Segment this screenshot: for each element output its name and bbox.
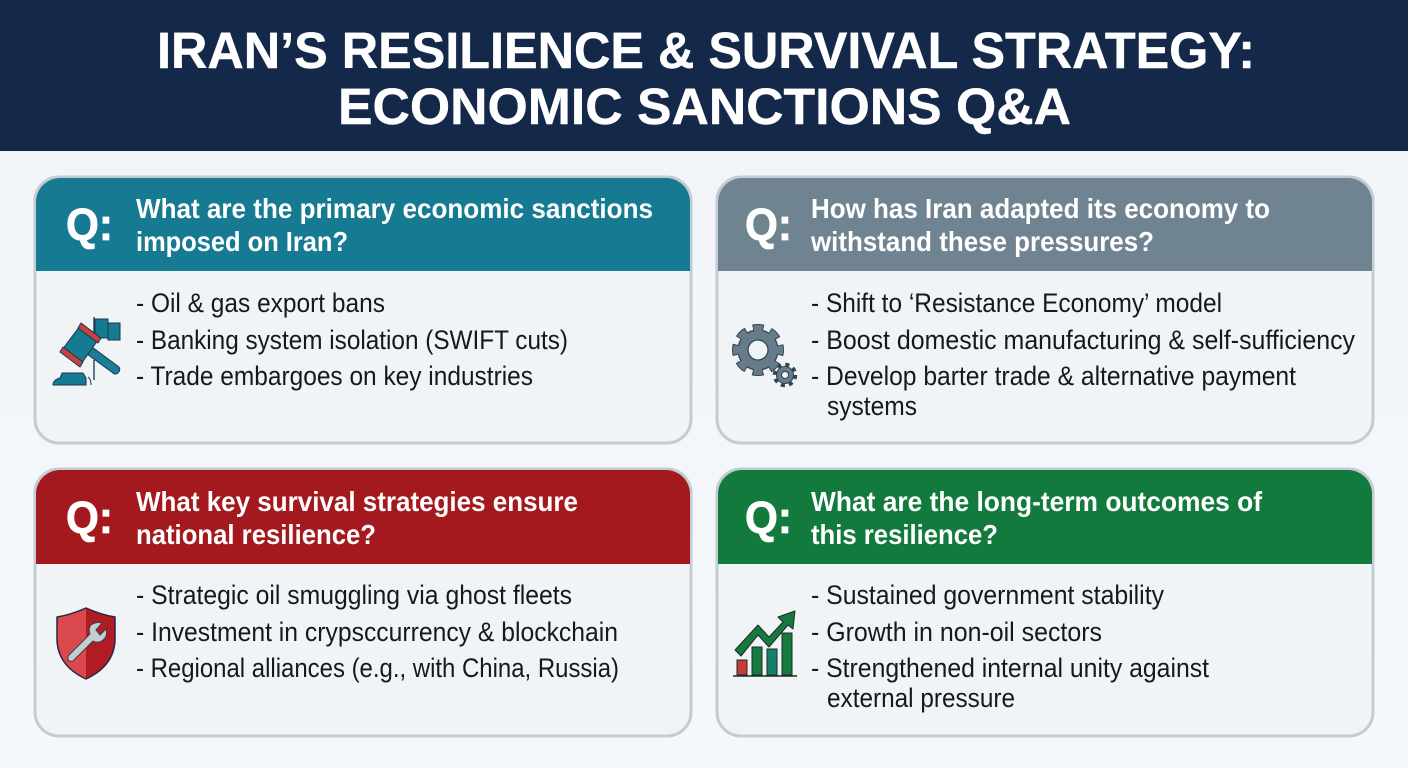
panel header: teal question: What are the primary economic sanctions bbox=[136, 193, 653, 224]
panel header: grey question bbox=[718, 178, 1372, 271]
survival list: - Strategic oil smuggling via ghost fleets bbox=[136, 580, 572, 610]
panel header: red question bbox=[36, 470, 690, 564]
panel: survival strategies bbox=[35, 469, 691, 736]
icon: gears bbox=[736, 328, 795, 385]
sanctions list bbox=[136, 288, 568, 391]
title banner: IRAN’S RESILIENCE & SURVIVAL STRATEGY: bbox=[157, 22, 1255, 79]
sanctions list: - Oil & gas export bans bbox=[136, 288, 385, 318]
panel header: red question: Q: bbox=[66, 492, 113, 543]
panel header: teal question: Q: bbox=[66, 199, 113, 250]
title banner: ECONOMIC SANCTIONS Q&A bbox=[338, 78, 1071, 135]
adaptation list: - Shift to ‘Resistance Economy’ model bbox=[811, 288, 1222, 318]
panel header: grey question: How has Iran adapted its economy to bbox=[811, 193, 1270, 224]
outcomes list: external pressure bbox=[827, 683, 1015, 713]
panel header: teal question: imposed on Iran? bbox=[136, 226, 348, 257]
adaptation list bbox=[811, 288, 1355, 421]
panel header: red question: What key survival strategies ensure bbox=[136, 486, 578, 517]
adaptation list: systems bbox=[827, 391, 917, 421]
panel: primary economic sanctions bbox=[35, 177, 691, 443]
title banner bbox=[0, 0, 1408, 151]
panel header: teal question bbox=[36, 178, 690, 271]
survival list bbox=[136, 580, 619, 683]
outcomes list: - Strengthened internal unity against bbox=[811, 653, 1209, 683]
icon: gavel bbox=[53, 317, 120, 385]
outcomes list bbox=[811, 580, 1209, 713]
panel: long-term outcomes bbox=[717, 469, 1373, 736]
adaptation list: - Develop barter trade & alternative payment bbox=[811, 361, 1296, 391]
outcomes list: - Growth in non-oil sectors bbox=[811, 617, 1102, 647]
panel: economic adaptation bbox=[717, 177, 1373, 443]
sanctions list: - Trade embargoes on key industries bbox=[136, 361, 533, 391]
outcomes list: - Sustained government stability bbox=[811, 580, 1164, 610]
panel header: green question: What are the long-term outcomes of bbox=[811, 486, 1263, 517]
adaptation list: - Boost domestic manufacturing & self-sufficiency bbox=[811, 325, 1355, 355]
panel header: green question: this resilience? bbox=[811, 519, 998, 550]
panel header: grey question: Q: bbox=[745, 199, 792, 250]
icon: shield with wrench bbox=[57, 608, 115, 679]
panel header: red question: national resilience? bbox=[136, 519, 376, 550]
icon: growth chart bbox=[733, 611, 797, 676]
panel header: green question bbox=[718, 470, 1372, 564]
survival list: - Investment in crypsccurrency & blockchain bbox=[136, 617, 618, 647]
panel header: green question: Q: bbox=[745, 492, 792, 543]
survival list: - Regional alliances (e.g., with China, Russia) bbox=[136, 653, 619, 683]
panel header: grey question: withstand these pressures? bbox=[810, 226, 1154, 257]
sanctions list: - Banking system isolation (SWIFT cuts) bbox=[136, 325, 568, 355]
